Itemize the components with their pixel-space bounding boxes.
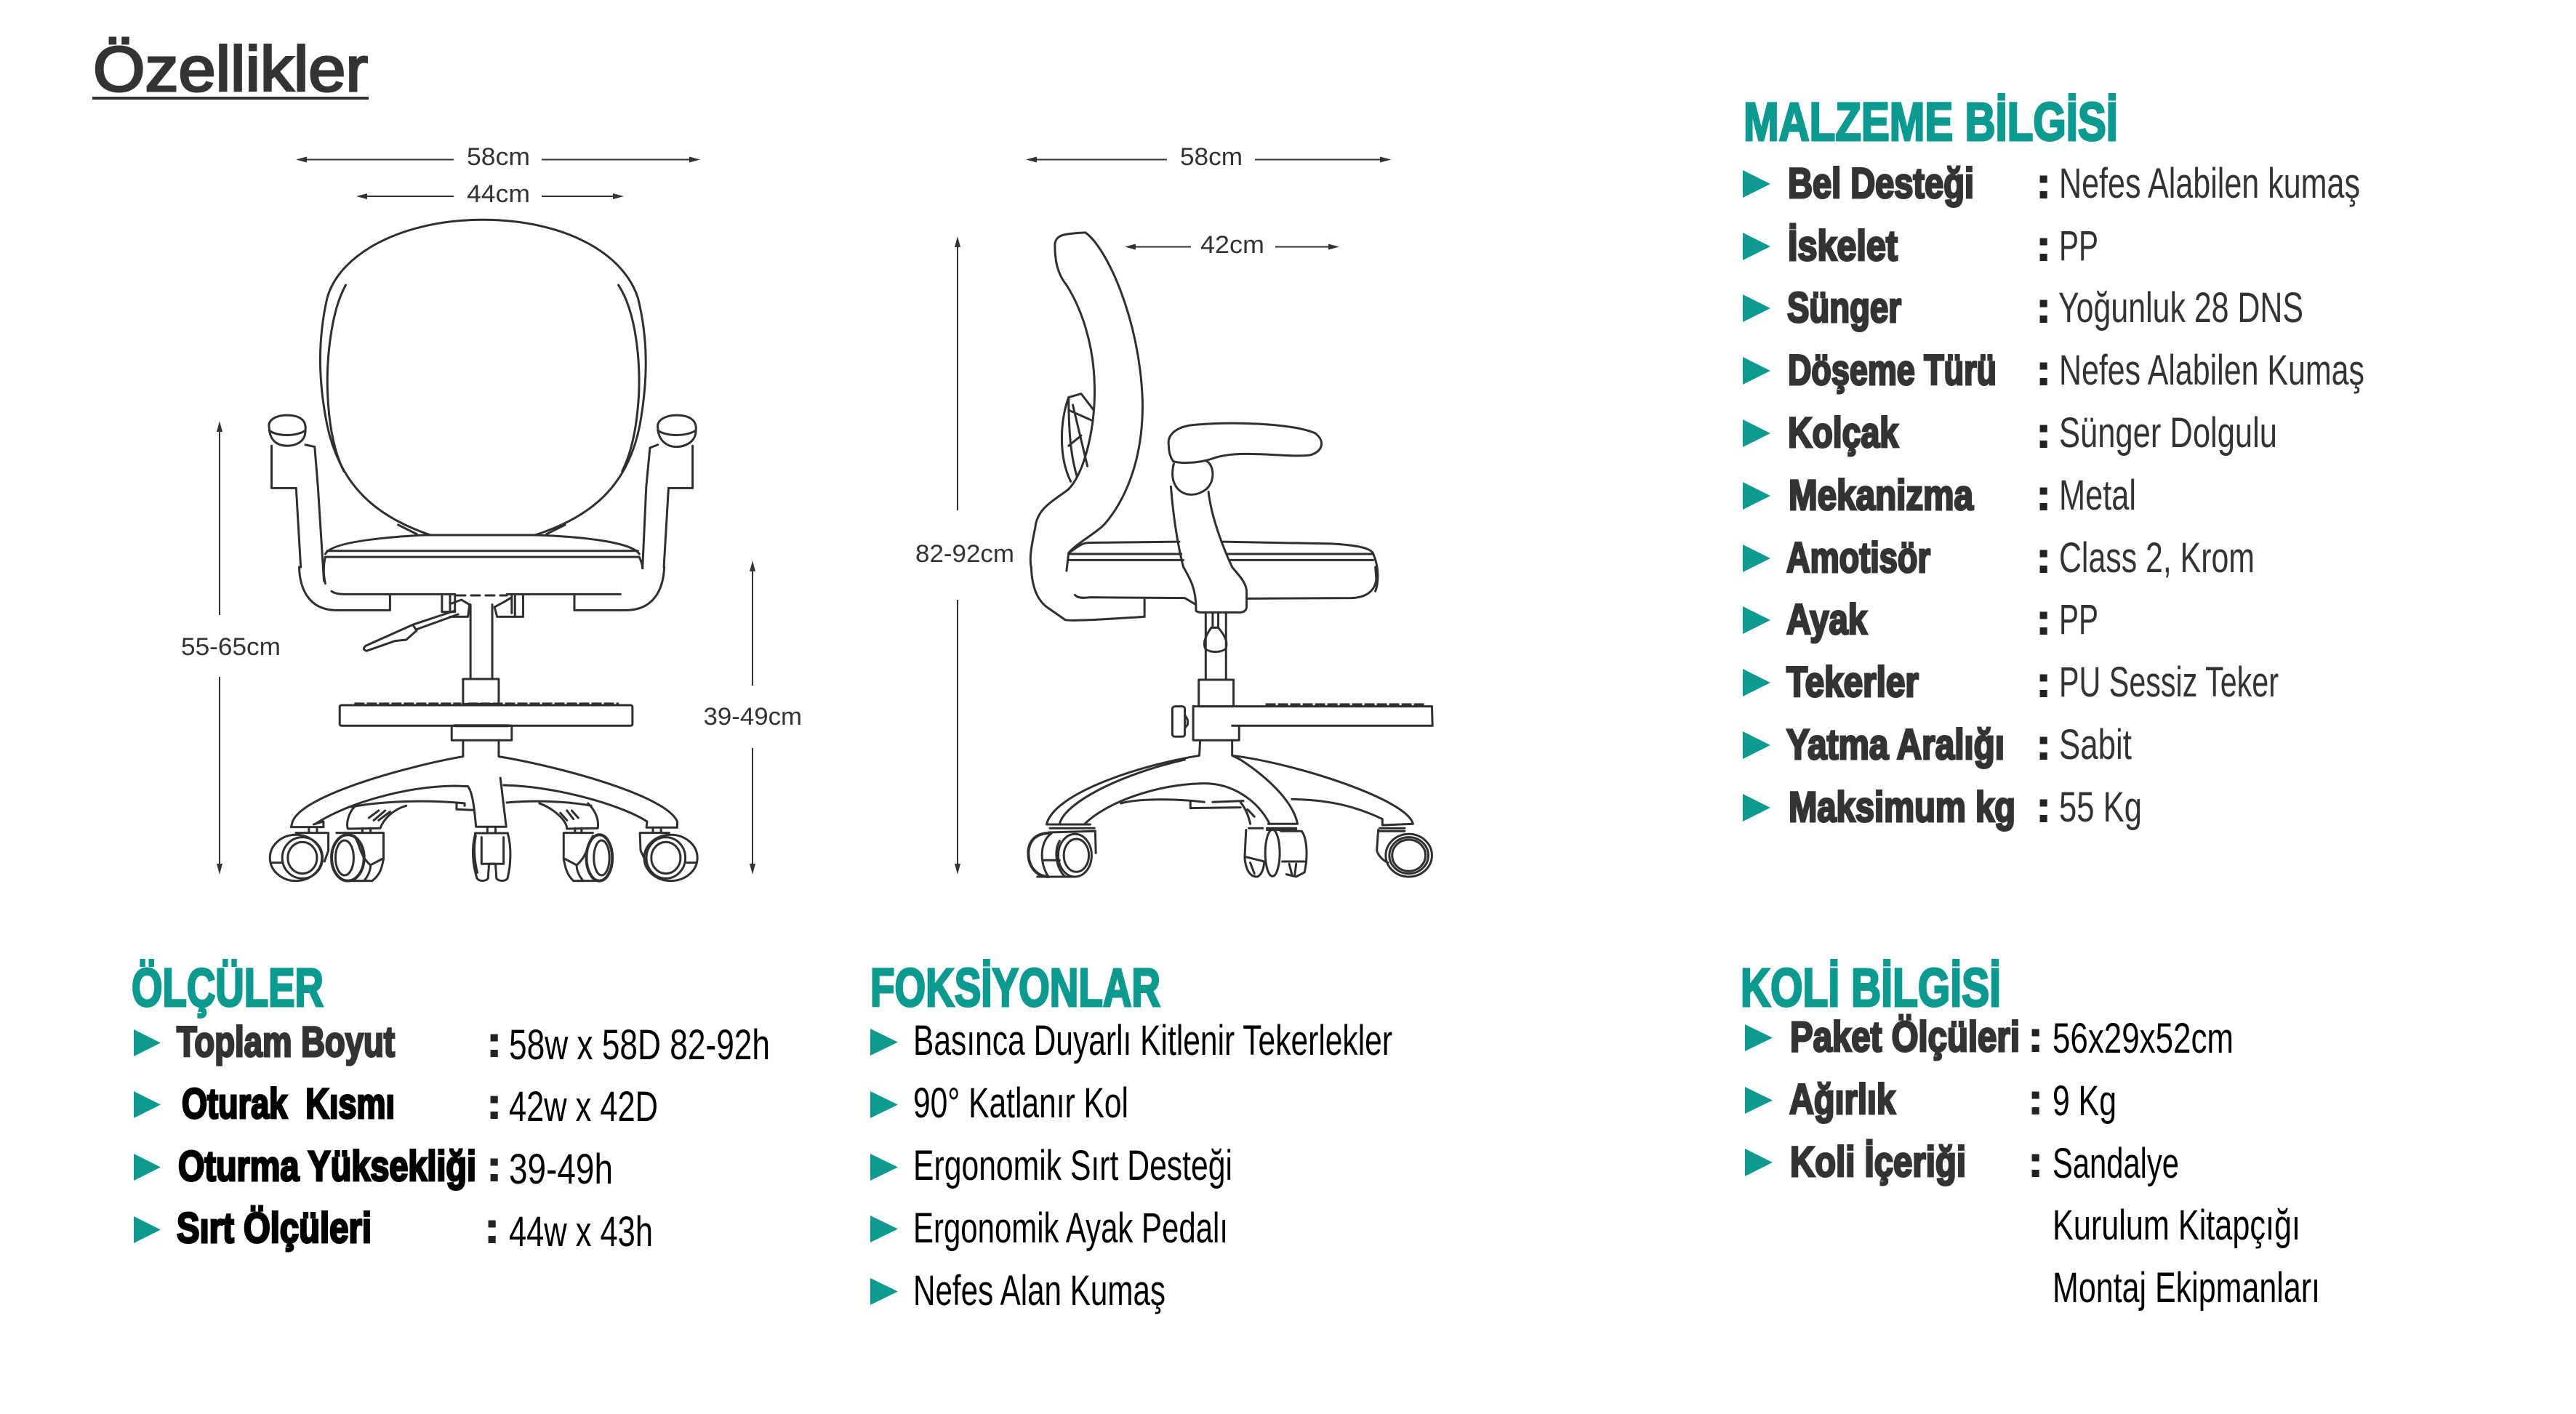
row: oturak kismi [134, 1080, 658, 1130]
row: iskelet [1743, 222, 2098, 270]
row: amotisor [1743, 534, 2255, 582]
row: bel destegi: Bel Desteği [1788, 160, 1974, 207]
row: amotisor: Amotisör [1786, 534, 1930, 582]
row: doseme turu: : [2037, 347, 2050, 394]
row: doseme turu: Döşeme Türü [1788, 347, 1997, 394]
dimension 82-92cm [915, 236, 1014, 875]
row: tekerler: Tekerler [1786, 659, 1919, 706]
dimension 58cm side: 58cm [1180, 143, 1243, 171]
row: paket olculeri: : [2029, 1013, 2042, 1061]
heading: foksiyonlar: FOKSİYONLAR [870, 957, 1160, 1018]
item: katlanir kol [870, 1080, 1128, 1127]
row: sunger: : [2037, 284, 2050, 332]
dimension 55-65cm: 55-65cm [181, 633, 281, 661]
item: ayak pedali [870, 1205, 1228, 1252]
row: iskelet: : [2037, 222, 2050, 270]
panel: malzeme bilgisi [1743, 92, 2364, 831]
row: yatma araligi [1743, 721, 2132, 768]
row: mekanizma: Metal [2059, 472, 2136, 519]
row: sunger: Sünger [1787, 284, 1901, 332]
row: maksimum kg [1743, 784, 2142, 831]
row: paket olculeri [1745, 1013, 2234, 1062]
row: mekanizma [1743, 472, 2136, 519]
row: toplam boyut: 58w x 58D 82-92h [509, 1021, 770, 1069]
row: sunger [1743, 284, 2303, 332]
side caster right [1377, 830, 1432, 877]
row: doseme turu [1743, 347, 2364, 394]
caster 3 [473, 833, 510, 881]
item: katlanir kol: 90° Katlanır Kol [913, 1080, 1128, 1127]
chair side: backrest, armrest and seat [1030, 233, 1378, 591]
row: agirlik: : [2029, 1076, 2042, 1123]
row: toplam boyut [134, 1019, 770, 1069]
row: kolcak [1743, 409, 2277, 457]
side view chair drawing [1028, 233, 1432, 877]
row: ayak: Ayak [1786, 596, 1868, 643]
chair front: backrest, armrests and seat [269, 220, 696, 584]
dimension 58cm side [1026, 143, 1392, 171]
row: iskelet: PP [2059, 222, 2098, 270]
row: agirlik: Ağırlık [1789, 1076, 1896, 1123]
row: tekerler: PU Sessiz Teker [2059, 659, 2279, 706]
row: sirt olculeri: Sırt Ölçüleri [177, 1205, 372, 1252]
item: basinca duyarli: Basınca Duyarlı Kitlenir Tekerlekler [913, 1017, 1392, 1064]
front view chair drawing [269, 220, 697, 881]
row: mekanizma: Mekanizma [1789, 472, 1974, 519]
row: oturma yuksekligi: : [487, 1143, 501, 1190]
front view dimensions [181, 143, 802, 875]
heading: koli bilgisi: KOLİ BİLGİSİ [1741, 957, 2001, 1018]
heading: malzeme bilgisi: MALZEME BİLGİSİ [1744, 92, 2118, 152]
row: maksimum kg: 55 Kg [2059, 784, 2142, 831]
row: paket olculeri: 56x29x52cm [2053, 1015, 2234, 1062]
dimension 42cm [1125, 231, 1339, 259]
row: ayak: PP [2059, 596, 2098, 643]
caster 4 [563, 833, 612, 881]
row: oturak kismi: : [487, 1080, 501, 1128]
dimension 42cm: 42cm [1200, 231, 1264, 259]
row: maksimum kg: Maksimum kg [1789, 784, 2015, 831]
side view dimensions [915, 143, 1392, 875]
row: toplam boyut: Toplam Boyut [177, 1019, 395, 1066]
item: sirt destegi: Ergonomik Sırt Desteği [913, 1142, 1232, 1189]
row: paket olculeri: Paket Ölçüleri [1790, 1013, 2020, 1061]
text: montaj ekipmanlari: Montaj Ekipmanları [2053, 1264, 2320, 1311]
dimension 39-49cm: 39-49cm [704, 703, 802, 731]
row: sunger: Yoğunluk 28 DNS [2058, 284, 2303, 332]
panel: foksiyonlar [870, 957, 1392, 1314]
row: ayak [1743, 596, 2098, 643]
dimension 39-49cm [704, 561, 802, 875]
dimension 82-92cm: 82-92cm [915, 540, 1014, 568]
row: sirt olculeri [134, 1205, 653, 1256]
row: tekerler [1743, 659, 2279, 706]
dimension 44cm [356, 180, 624, 208]
row: oturak kismi: Oturak Kısmı [182, 1080, 395, 1128]
row: kolcak: : [2037, 409, 2050, 457]
row: koli icerigi [1745, 1138, 2179, 1187]
row: toplam boyut: : [487, 1019, 501, 1066]
row: kolcak: Sünger Dolgulu [2059, 409, 2277, 457]
caster 1 [270, 833, 329, 881]
panel: olculer [132, 957, 770, 1256]
dimension 44cm: 44cm [467, 180, 530, 208]
chair front: mechanism, post, footrest, base and casters [270, 567, 697, 881]
row: yatma araligi: : [2037, 721, 2050, 768]
row: mekanizma: : [2037, 472, 2050, 519]
dimension 58cm [296, 143, 700, 171]
row: koli icerigi: Koli İçeriği [1790, 1138, 1966, 1186]
item: basinca duyarli [870, 1017, 1392, 1064]
row: koli icerigi: Sandalye [2053, 1140, 2179, 1187]
row: amotisor: : [2037, 534, 2050, 582]
heading: olculer: ÖLÇÜLER [132, 957, 324, 1018]
row: agirlik: 9 Kg [2053, 1077, 2116, 1125]
item: sirt destegi [870, 1142, 1232, 1189]
row: oturma yuksekligi: Oturma Yüksekliği [178, 1143, 476, 1190]
side caster group left [1028, 831, 1096, 877]
item: ayak pedali: Ergonomik Ayak Pedalı [913, 1205, 1228, 1252]
row: oturak kismi: 42w x 42D [509, 1083, 658, 1130]
text: kurulum kitapcigi: Kurulum Kitapçığı [2053, 1202, 2300, 1249]
row: agirlik [1745, 1076, 2116, 1125]
caster 5 [640, 833, 697, 881]
row: doseme turu: Nefes Alabilen Kumaş [2059, 347, 2364, 394]
item: nefes alan kumas: Nefes Alan Kumaş [913, 1267, 1165, 1314]
row: ayak: : [2037, 596, 2050, 643]
row: bel destegi: Nefes Alabilen kumaş [2059, 160, 2360, 207]
caster 2 [332, 833, 383, 881]
row: kolcak: Kolçak [1788, 409, 1899, 457]
row: bel destegi [1743, 160, 2360, 207]
row: iskelet: İskelet [1788, 222, 1898, 270]
panel: koli bilgisi [1741, 957, 2320, 1311]
row: maksimum kg: : [2037, 784, 2050, 831]
dimension 55-65cm [181, 421, 281, 875]
chair side: post, footrest, base and casters [1028, 567, 1432, 877]
dimension 58cm: 58cm [467, 143, 530, 171]
row: oturma yuksekligi: 39-49h [509, 1146, 613, 1193]
title: Özellikler [93, 34, 368, 105]
row: sirt olculeri: 44w x 43h [509, 1208, 653, 1256]
row: bel destegi: : [2037, 160, 2050, 207]
row: koli icerigi: : [2029, 1138, 2042, 1186]
row: yatma araligi: Sabit [2059, 721, 2132, 768]
side caster group middle [1245, 829, 1307, 877]
item: nefes alan kumas [870, 1267, 1165, 1314]
row: sirt olculeri: : [485, 1205, 499, 1252]
row: amotisor: Class 2, Krom [2059, 534, 2255, 582]
row: tekerler: : [2037, 659, 2050, 706]
row: yatma araligi: Yatma Aralığı [1786, 721, 2005, 768]
